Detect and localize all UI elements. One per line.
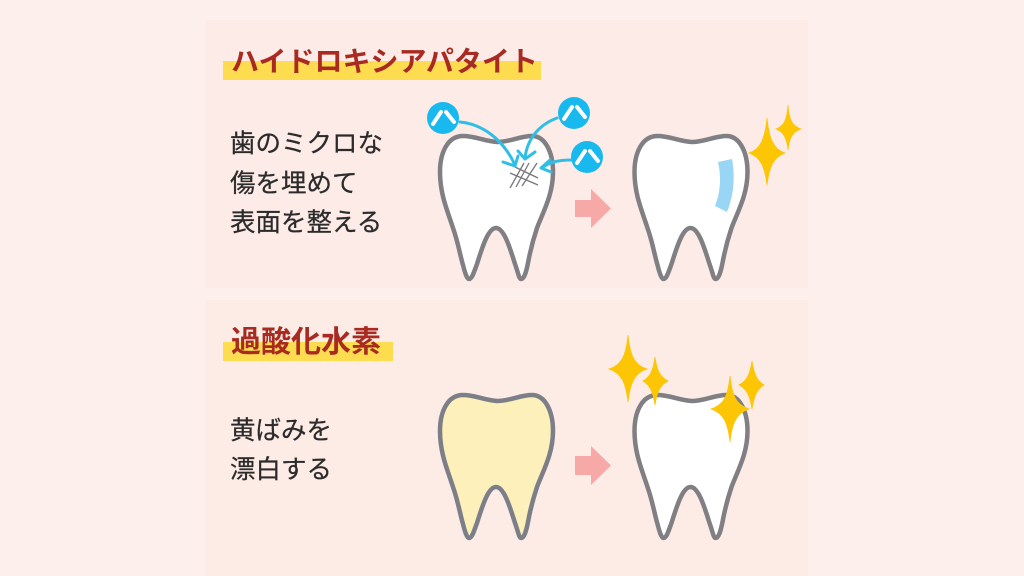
icon: yellow tooth bbox=[440, 395, 553, 538]
text block: hydroxyapatite effect: 傷を埋めて bbox=[230, 170, 358, 198]
arrow: bottom bbox=[575, 446, 611, 485]
arrow: top bbox=[575, 189, 611, 228]
icon: damaged tooth bbox=[440, 136, 553, 279]
heading: hydrogen peroxide: 過酸化水素 bbox=[231, 326, 381, 359]
text block: hydrogen peroxide effect bbox=[230, 417, 332, 484]
icon: sparkle small top bbox=[776, 105, 801, 150]
icon: whitened tooth bbox=[634, 395, 748, 538]
icon: particle 1 bbox=[427, 102, 459, 134]
icon: repaired tooth bbox=[634, 136, 748, 279]
text block: hydroxyapatite effect: 表面を整える bbox=[230, 209, 382, 237]
arrows: particles to crack bbox=[460, 118, 572, 172]
cracks bbox=[510, 163, 538, 188]
icon: particle 2 bbox=[558, 97, 590, 129]
heading highlight: hydrogen peroxide bbox=[223, 342, 393, 361]
icon: sparkle 3 bbox=[711, 376, 749, 442]
text block: hydrogen peroxide effect: 漂白する bbox=[230, 456, 332, 484]
icon: particle 3 bbox=[571, 141, 603, 173]
heading highlight: hydroxyapatite bbox=[223, 61, 541, 80]
text block: hydrogen peroxide effect: 黄ばみを bbox=[230, 417, 332, 445]
icon: sparkle 4 bbox=[739, 361, 764, 409]
heading: hydroxyapatite: ハイドロキシアパタイト bbox=[231, 46, 538, 77]
text block: hydroxyapatite effect: 歯のミクロな bbox=[230, 130, 383, 158]
panel: hydrogen peroxide bbox=[205, 300, 808, 576]
icon: sparkle large top bbox=[749, 118, 785, 185]
panel: hydroxyapatite bbox=[205, 20, 808, 288]
icon: sparkle 1 bbox=[609, 335, 647, 402]
repair patch bbox=[715, 159, 734, 212]
icon: sparkle 2 bbox=[643, 357, 668, 405]
text block: hydroxyapatite effect bbox=[230, 130, 383, 237]
